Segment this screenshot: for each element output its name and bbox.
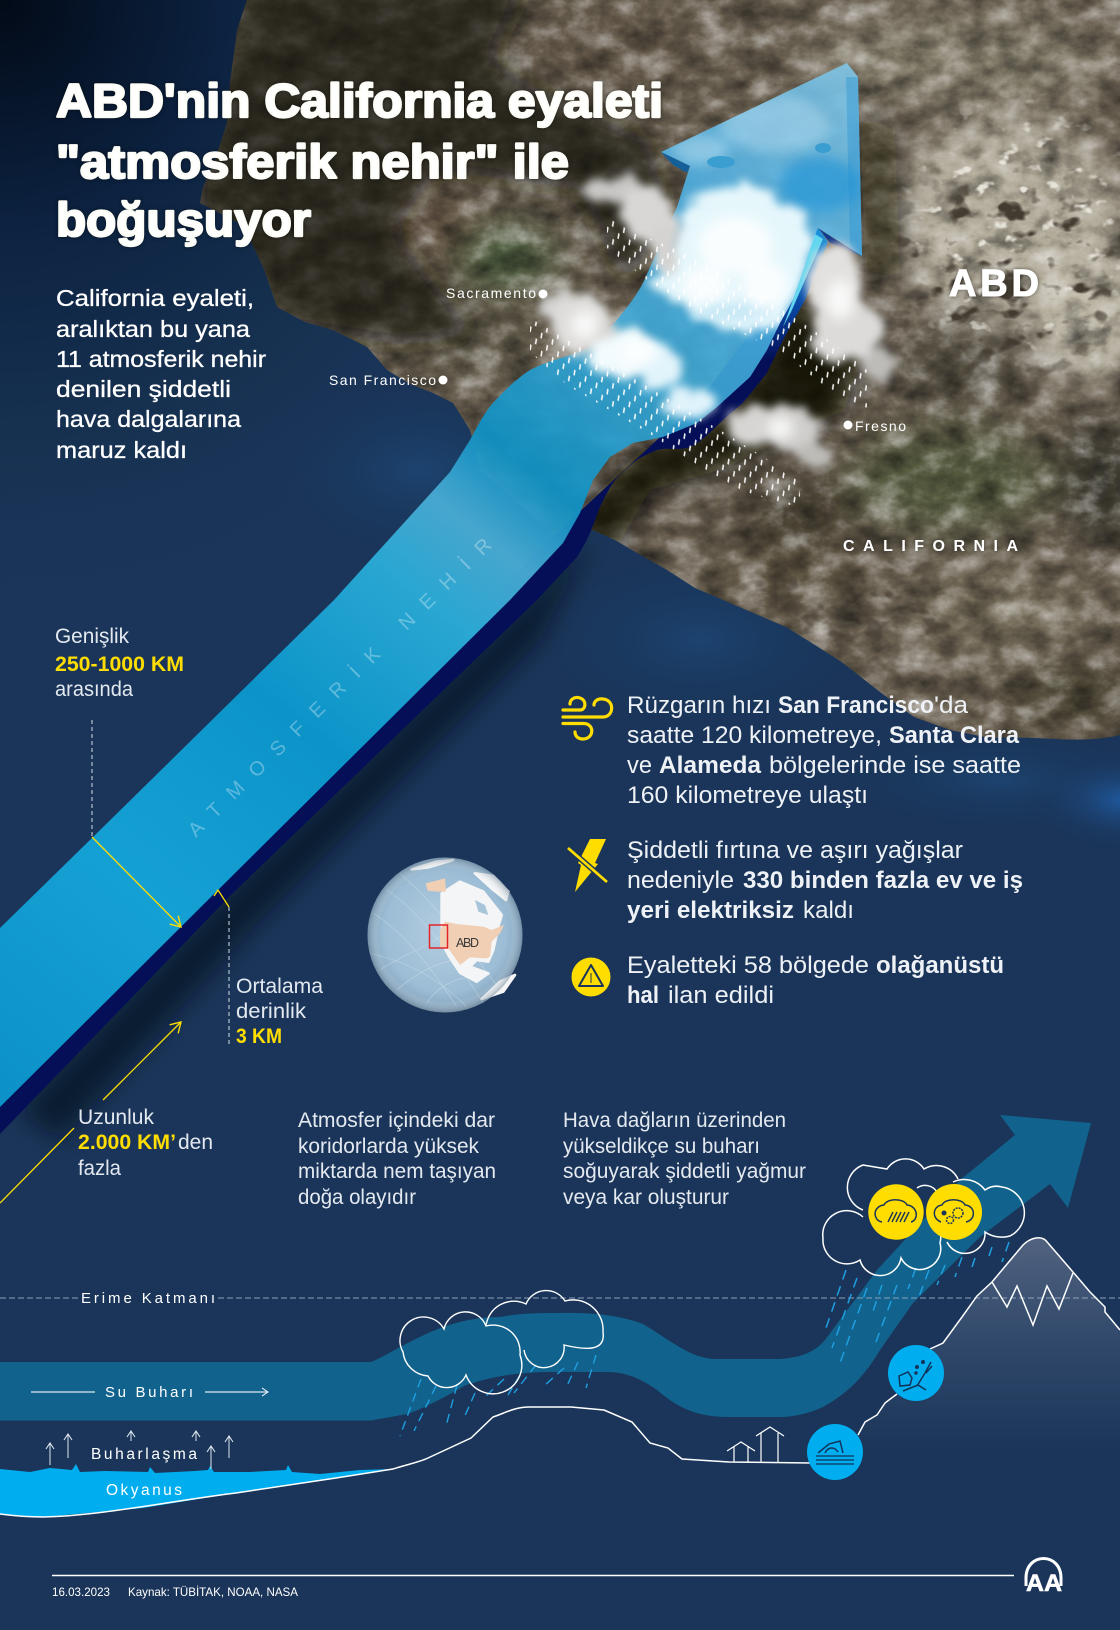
intro text: aralıktan bu yana bbox=[56, 316, 250, 342]
fact: wind speed: bölgelerinde ise saatte bbox=[769, 752, 1021, 779]
evaporation arrows bbox=[50, 1431, 229, 1469]
fact: power outage: kaldı bbox=[803, 897, 854, 924]
title: "atmosferik nehir" ile bbox=[56, 135, 569, 188]
fact: wind speed: 160 kilometreye ulaştı bbox=[627, 782, 868, 809]
fact: wind speed: ve bbox=[627, 752, 652, 779]
intro text: California eyaleti, bbox=[56, 285, 254, 311]
measure: depth: 3 KM bbox=[236, 1025, 282, 1048]
ocean bbox=[0, 1464, 393, 1517]
river shadow on land bbox=[570, 110, 900, 560]
intro text: maruz kaldı bbox=[56, 437, 187, 463]
text: mechanism: yükseldikçe su buharı bbox=[563, 1135, 760, 1158]
measure: width bbox=[55, 625, 184, 927]
text: definition bbox=[298, 1109, 496, 1209]
vapour band arrow bbox=[0, 1115, 1091, 1420]
title bbox=[56, 74, 663, 246]
measure: length: 2.000 KM’ bbox=[78, 1131, 176, 1154]
melting layer line bbox=[0, 1297, 1120, 1299]
dark forests bbox=[195, 0, 670, 345]
label: Sacramento: Sacramento bbox=[446, 285, 536, 301]
cloud inside the arrow neck bbox=[650, 182, 815, 335]
text: definition: miktarda nem taşıyan bbox=[298, 1160, 496, 1183]
rain streaks over land bbox=[530, 217, 867, 508]
icon: snow bbox=[926, 1184, 982, 1240]
measure: width: 250-1000 KM bbox=[55, 653, 184, 676]
label: San Francisco: San Francisco bbox=[329, 372, 436, 388]
fact: power outage: nedeniyle bbox=[627, 867, 734, 894]
fact: state of emergency: ilan edildi bbox=[668, 982, 774, 1009]
fact: wind speed: saatte 120 kilometreye, bbox=[627, 722, 882, 749]
low rain bbox=[400, 1355, 596, 1436]
fact: wind speed: Rüzgarın hızı bbox=[627, 692, 771, 719]
snow line bbox=[992, 1273, 1073, 1325]
title: ABD'nin California eyaleti bbox=[56, 74, 663, 127]
fact: wind speed: San Francisco bbox=[778, 692, 934, 719]
snow patches bbox=[902, 88, 1120, 366]
fact: wind speed: 'da bbox=[934, 692, 969, 719]
arrow barb depth bbox=[661, 152, 690, 173]
arrow head surface detail bbox=[672, 97, 860, 213]
icon: flood bbox=[807, 1424, 863, 1480]
arrow side strip bbox=[846, 77, 862, 256]
measure: length: fazla bbox=[78, 1157, 121, 1180]
globe locator map: ABD bbox=[456, 936, 479, 950]
text: mechanism: soğuyarak şiddetli yağmur bbox=[563, 1160, 806, 1183]
cyan neck strip bbox=[783, 234, 823, 327]
fact: state of emergency bbox=[572, 952, 1004, 1009]
label: ocean: Okyanus bbox=[106, 1482, 182, 1499]
text: mechanism: veya kar oluşturur bbox=[563, 1186, 729, 1209]
text: definition: koridorlarda yüksek bbox=[298, 1135, 479, 1158]
houses bbox=[727, 1427, 784, 1462]
intro text: 11 atmosferik nehir bbox=[56, 346, 266, 372]
fact: power outage: yeri elektriksiz bbox=[627, 897, 794, 924]
terrain line bbox=[0, 1238, 1120, 1517]
river top face and arrow head bbox=[0, 63, 862, 1107]
icon: warning bbox=[572, 958, 610, 996]
high rain bbox=[826, 1242, 1009, 1363]
measure: depth: derinlik bbox=[236, 1000, 307, 1023]
fact: state of emergency: Eyaletteki 58 bölgede bbox=[627, 952, 869, 979]
satellite map of California bbox=[200, 0, 1120, 740]
measure: length: Uzunluk bbox=[78, 1106, 154, 1129]
icon: wind bbox=[563, 697, 612, 739]
river side depth bbox=[0, 228, 828, 1134]
arrow notch depth bbox=[818, 228, 862, 256]
text: mechanism bbox=[563, 1109, 806, 1209]
label: melting layer: Erime Katmanı bbox=[81, 1290, 215, 1307]
footer bbox=[52, 1558, 1062, 1599]
diagram: water vapour cross-section bbox=[0, 1115, 1120, 1517]
mountain bbox=[858, 1238, 1120, 1460]
icon: rain bbox=[868, 1184, 924, 1240]
text: definition: doğa olayıdır bbox=[298, 1186, 416, 1209]
fact: state of emergency: olağanüstü bbox=[876, 952, 1004, 979]
fact: power outage: 330 binden fazla ev ve iş bbox=[743, 867, 1023, 894]
icon: landslide bbox=[888, 1345, 944, 1401]
label: vapour: Su Buharı bbox=[105, 1384, 193, 1401]
mountain ridges bbox=[730, 146, 1120, 672]
measure: depth bbox=[214, 890, 323, 1048]
title: boğuşuyor bbox=[56, 193, 311, 246]
cloud highlights bbox=[571, 217, 854, 440]
text: mechanism: Hava dağların üzerinden bbox=[563, 1109, 786, 1132]
label: ABD: ABD bbox=[949, 263, 1039, 305]
clouds bbox=[542, 177, 900, 467]
fact: power outage bbox=[568, 837, 1023, 924]
measure: depth: Ortalama bbox=[236, 975, 323, 998]
shadow of the river on the ocean bbox=[20, 540, 590, 1140]
icon: crossed lightning bbox=[568, 839, 607, 892]
date: 16.03.2023 bbox=[52, 1585, 110, 1599]
high clouds bbox=[823, 1159, 1024, 1276]
label: Fresno: Fresno bbox=[855, 418, 906, 434]
fact: power outage: Şiddetli fırtına ve aşırı yağışlar bbox=[627, 837, 963, 864]
low clouds bbox=[400, 1291, 603, 1394]
intro text: hava dalgalarına bbox=[56, 406, 241, 432]
river label: ATMOSFERİK NEHİR bbox=[183, 534, 496, 842]
intro text: denilen şiddetli bbox=[56, 376, 231, 402]
intro text bbox=[56, 285, 266, 463]
fact: wind speed: Alameda bbox=[659, 752, 762, 779]
source: Kaynak: TÜBİTAK, NOAA, NASA bbox=[128, 1585, 298, 1599]
measure: length: den bbox=[178, 1131, 213, 1154]
logo bbox=[1026, 1558, 1062, 1597]
fact: wind speed: Santa Clara bbox=[889, 722, 1020, 749]
measure: length bbox=[0, 1022, 213, 1203]
cloud masses bbox=[542, 177, 900, 467]
text: definition: Atmosfer içindeki dar bbox=[298, 1109, 495, 1132]
measure: width: arasında bbox=[55, 678, 133, 701]
globe locator map bbox=[368, 858, 522, 1012]
label: California: CALIFORNIA bbox=[843, 538, 1018, 555]
label: evaporation: Buharlaşma bbox=[91, 1446, 197, 1463]
fact: state of emergency: hal bbox=[627, 982, 659, 1009]
measure: width: Genişlik bbox=[55, 625, 129, 648]
logo: AA bbox=[1026, 1570, 1062, 1597]
city labels bbox=[329, 263, 1039, 555]
fact: wind speed bbox=[563, 692, 1021, 809]
atmospheric river ribbon bbox=[0, 63, 862, 1134]
